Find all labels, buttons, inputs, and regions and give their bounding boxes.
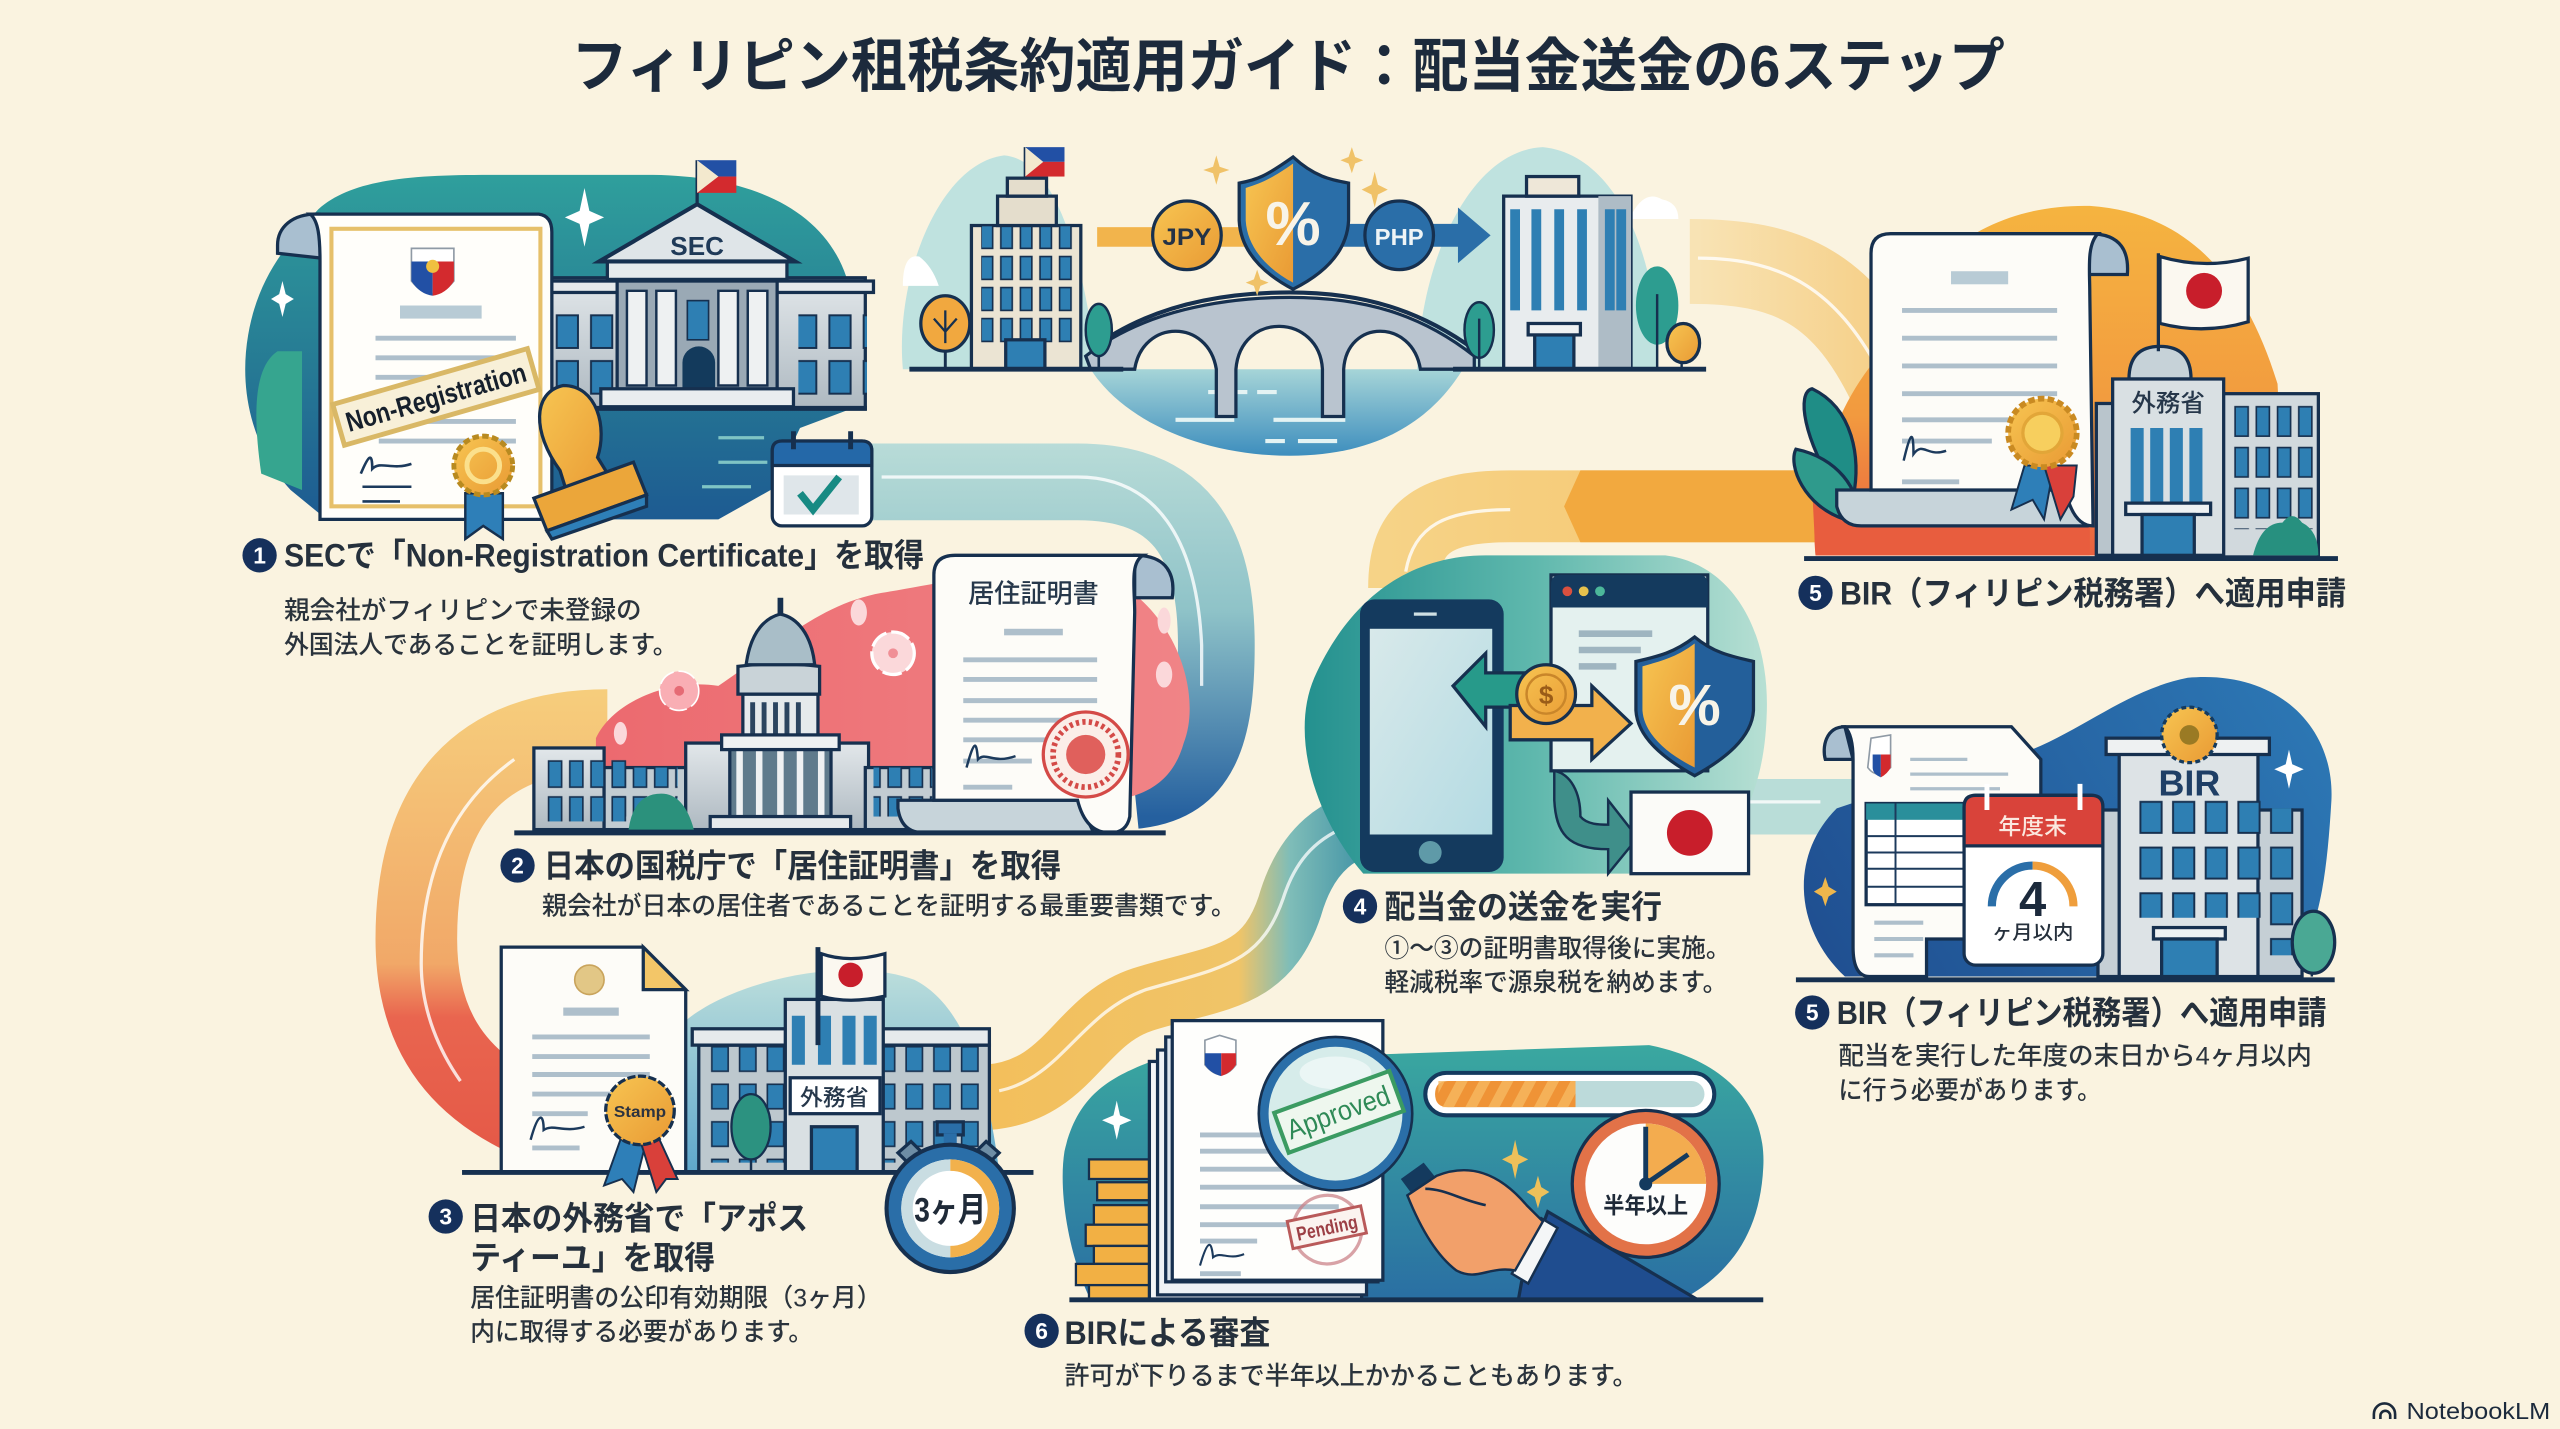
- icon: deadline calendar: 4: [2019, 873, 2046, 927]
- text: step 1 description: SECで「Non-Registration Certificate」を取得: [284, 537, 924, 574]
- text: step 2 description: 親会社が日本の居住者であることを証明する最重要書類です。: [542, 892, 1236, 920]
- building: 外務省: 外務省: [2131, 390, 2205, 418]
- text: step 4 description: 軽減税率で源泉税を納めます。: [1384, 969, 1727, 997]
- document: Non-Registration certificate: [278, 214, 552, 519]
- text: BIR application description: [1795, 994, 2327, 1105]
- text: step 5 heading top: 5: [1809, 580, 1822, 606]
- panel: step 3 Apostille: [462, 947, 1033, 1272]
- icon: percent shield: [1203, 147, 1388, 296]
- icon: deadline calendar: [1964, 784, 2103, 965]
- panel: treaty bridge: [902, 147, 1706, 456]
- building: BIR: [2098, 707, 2335, 977]
- text: step 2 description: [500, 847, 1236, 920]
- icon: percent shield: [1636, 637, 1753, 776]
- icon: dollar coin: $: [1539, 680, 1554, 710]
- text: step 6 description: 許可が下りるまで半年以上かかることもあります。: [1064, 1363, 1638, 1391]
- text: BIR application description: 配当を実行した年度の末日から4ヶ月以内: [1838, 1043, 2312, 1071]
- text: step 1 description: 親会社がフィリピンで未登録の: [284, 597, 642, 625]
- text: step 2 description: 日本の国税庁で「居住証明書」を取得: [544, 847, 1061, 884]
- text: step 3 description: 日本の外務省で「アポス: [470, 1200, 808, 1237]
- icon: Pending stamp: Pending: [1294, 1211, 1360, 1246]
- icon: gold seal with ribbons: [2008, 399, 2077, 519]
- text: step 3 description: ティーユ」を取得: [470, 1239, 715, 1276]
- text: step 3 description: 3: [439, 1204, 452, 1230]
- icon: deadline calendar: 年度末: [1998, 813, 2067, 839]
- building: right office: [1504, 177, 1631, 369]
- icon: orange tree: [921, 296, 970, 369]
- arrow: orange right arrow: [1510, 686, 1631, 759]
- text: step 1 description: 外国法人であることを証明します。: [284, 631, 678, 659]
- arrow: flow ribbon bridge to step 5: [1690, 258, 1894, 392]
- icon: 3-month stopwatch: 3ヶ月: [914, 1191, 986, 1229]
- icon: dollar coin: [1517, 665, 1576, 723]
- icon: magnifying glass with hand: [1259, 1037, 1543, 1275]
- icon: small coin: [1667, 323, 1700, 369]
- icon: smartphone: [1360, 599, 1504, 872]
- icon: bridge: [1086, 292, 1474, 417]
- icon: coat of arms: [411, 248, 454, 296]
- text: step 4 description: [1343, 888, 1731, 997]
- label: Non-Registration stamp: Non-Registration: [342, 357, 530, 438]
- icon: clouds: [903, 196, 1678, 286]
- building: Ministry of Foreign Affairs: [692, 999, 989, 1172]
- building: left office: [971, 147, 1081, 369]
- text: step 1 description: [242, 537, 924, 659]
- panel: step 4 dividend remittance: [1305, 555, 1767, 874]
- icon: cherry blossoms: [614, 599, 1172, 745]
- text: step 1 description: 1: [253, 542, 266, 568]
- icon: teal trees: [1086, 266, 1678, 369]
- text: step 3 description: [429, 1199, 882, 1347]
- arrow: JPY to PHP currency: [1097, 208, 1491, 263]
- icon: Japanese flag: [2158, 253, 2248, 351]
- document: BIR form: [1824, 727, 2041, 977]
- building: SEC: SEC: [670, 231, 724, 261]
- text: step 3 description: 居住証明書の公印有効期限（3ヶ月）: [470, 1284, 882, 1312]
- icon: half-year clock: [1572, 1110, 1719, 1257]
- icon: Philippine flag: [697, 160, 736, 193]
- icon: leaves: [1794, 389, 1858, 519]
- title: フィリピン租税条約適用ガイド：配当金送金の6ステップ: [571, 35, 2005, 100]
- document: residence certificate: [898, 555, 1173, 833]
- icon: red seal: [1043, 712, 1128, 797]
- building: SEC: [544, 160, 873, 408]
- icon: suit arm: [1512, 1212, 1698, 1300]
- icon: PHP coin: PHP: [1375, 224, 1424, 250]
- arrow: teal left arrow: [1453, 653, 1559, 727]
- text: step 2 description: 2: [511, 853, 524, 879]
- arrow: flow ribbon step 1 to step 2: [857, 477, 1216, 790]
- icon: sparkles: [271, 188, 604, 317]
- panel: step 5 Ministry of Foreign Affairs: [1794, 206, 2338, 559]
- document: apostille: [501, 947, 686, 1172]
- text: step 3 description: 内に取得する必要があります。: [470, 1319, 813, 1347]
- panel: step 2 National Tax Agency: [514, 555, 1190, 833]
- icon: Japanese flag: [1631, 792, 1749, 874]
- arrow: flow ribbon step 4 to step 5: [1404, 470, 1845, 588]
- icon: PHP coin: [1365, 201, 1433, 270]
- panel: step 1 SEC: [245, 160, 873, 539]
- text: step 5 heading top: BIR（フィリピン税務署）へ適用申請: [1840, 574, 2346, 611]
- icon: JPY coin: [1153, 201, 1221, 270]
- icon: rubber stamp: [534, 386, 647, 539]
- document: residence certificate: 居住証明書: [968, 579, 1099, 609]
- icon: Pending stamp: [1283, 1188, 1371, 1271]
- building: BIR: BIR: [2158, 762, 2220, 803]
- panel: step 5 BIR application: [1796, 677, 2335, 980]
- icon: progress bar: [1425, 1073, 1714, 1115]
- text: step 6 description: [1024, 1314, 1638, 1391]
- text: BIR application description: 5: [1806, 1000, 1819, 1026]
- document: scroll certificate: [1837, 234, 2128, 526]
- icon: browser window: [1551, 575, 1708, 771]
- arrow: flow ribbon step 4 to BIR: [1739, 802, 1853, 807]
- logo: NotebookLM watermark: NotebookLM: [2407, 1398, 2550, 1424]
- text: BIR application description: BIR（フィリピン税務署）へ適用申請: [1837, 994, 2327, 1031]
- panel: step 6 BIR review: [1063, 1021, 1763, 1300]
- icon: Japanese flag: [818, 947, 885, 1045]
- icon: coin stack: [1076, 1159, 1149, 1300]
- icon: JPY coin: JPY: [1162, 224, 1211, 251]
- icon: half-year clock: 半年以上: [1603, 1192, 1688, 1218]
- icon: 3-month stopwatch: [887, 1122, 1014, 1272]
- text: step 6 description: 6: [1035, 1318, 1048, 1344]
- icon: apostille seal: Stamp: [614, 1104, 666, 1121]
- icon: percent shield: %: [1265, 190, 1321, 259]
- icon: gold seal: [454, 436, 513, 539]
- arrow: remittance to Japan: [1554, 771, 1638, 874]
- building: Diet building: [534, 598, 940, 830]
- text: step 4 description: ①～③の証明書取得後に実施。: [1384, 935, 1731, 963]
- icon: apostille seal: [604, 1076, 678, 1192]
- text: BIR application description: に行う必要があります。: [1838, 1077, 2101, 1105]
- icon: calendar: [772, 431, 872, 526]
- icon: deadline calendar: ヶ月以内: [1992, 922, 2073, 944]
- arrow: flow ribbon step 3 to step 4: [988, 817, 1388, 1097]
- icon: percent shield: %: [1669, 673, 1721, 738]
- building: 外務省: [2096, 346, 2318, 557]
- document: document stack under review: [1149, 1021, 1383, 1300]
- text: step 4 description: 配当金の送金を実行: [1384, 888, 1662, 925]
- arrow: flow ribbon step 2 to step 3: [416, 730, 607, 1114]
- icon: magnifying glass with hand: Approved: [1282, 1079, 1394, 1145]
- building: Ministry of Foreign Affairs: 外務省: [800, 1085, 869, 1111]
- text: step 4 description: 4: [1354, 894, 1367, 920]
- text: step 6 description: BIRによる審査: [1064, 1314, 1270, 1351]
